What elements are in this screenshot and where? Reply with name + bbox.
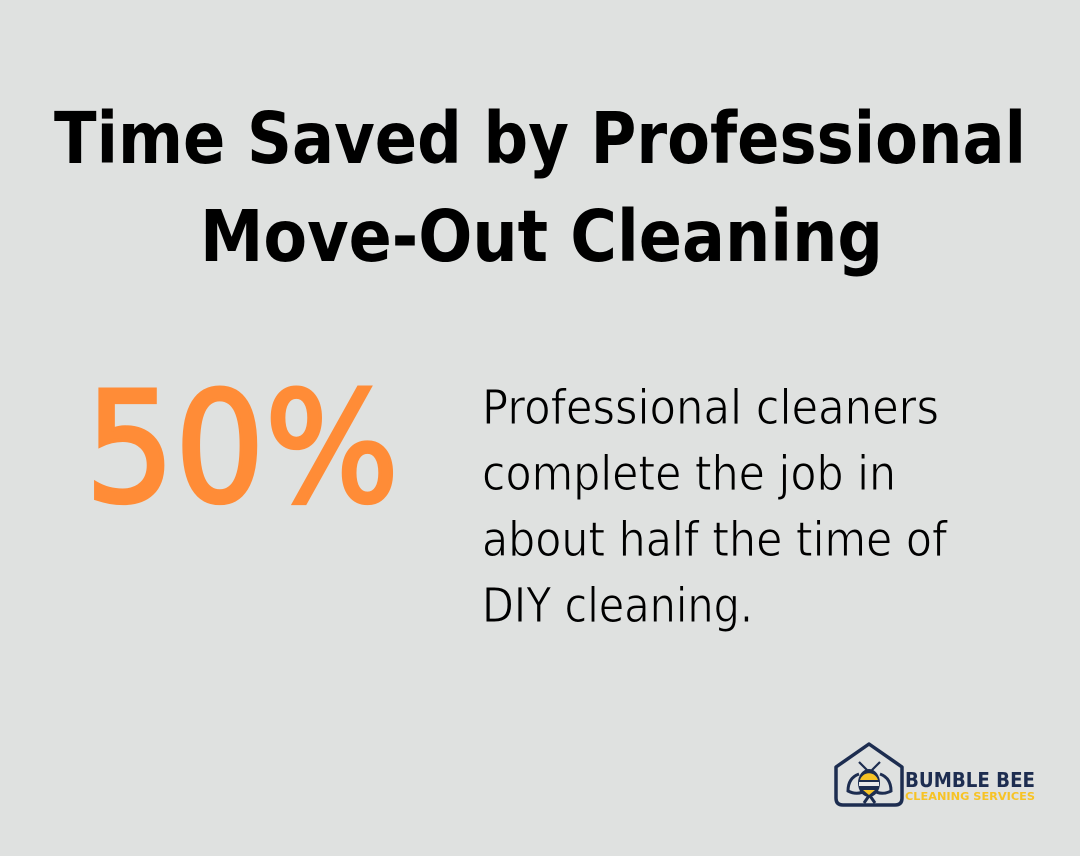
description text: complete the job in bbox=[482, 446, 896, 502]
description text: about half the time of bbox=[482, 512, 948, 568]
title bbox=[54, 97, 1026, 278]
description text: DIY cleaning. bbox=[482, 578, 753, 634]
title: Move-Out Cleaning bbox=[200, 195, 883, 278]
logo: Bumble Bee Cleaning Services bbox=[836, 744, 1035, 805]
statistic: 50%: 50% bbox=[85, 360, 399, 538]
icon: house outline with bee bbox=[836, 744, 902, 805]
logo wordmark: BUMBLE BEE bbox=[905, 768, 1035, 792]
description text: Professional cleaners bbox=[482, 380, 939, 436]
logo tagline: CLEANING SERVICES bbox=[905, 790, 1035, 803]
description text bbox=[482, 380, 948, 634]
